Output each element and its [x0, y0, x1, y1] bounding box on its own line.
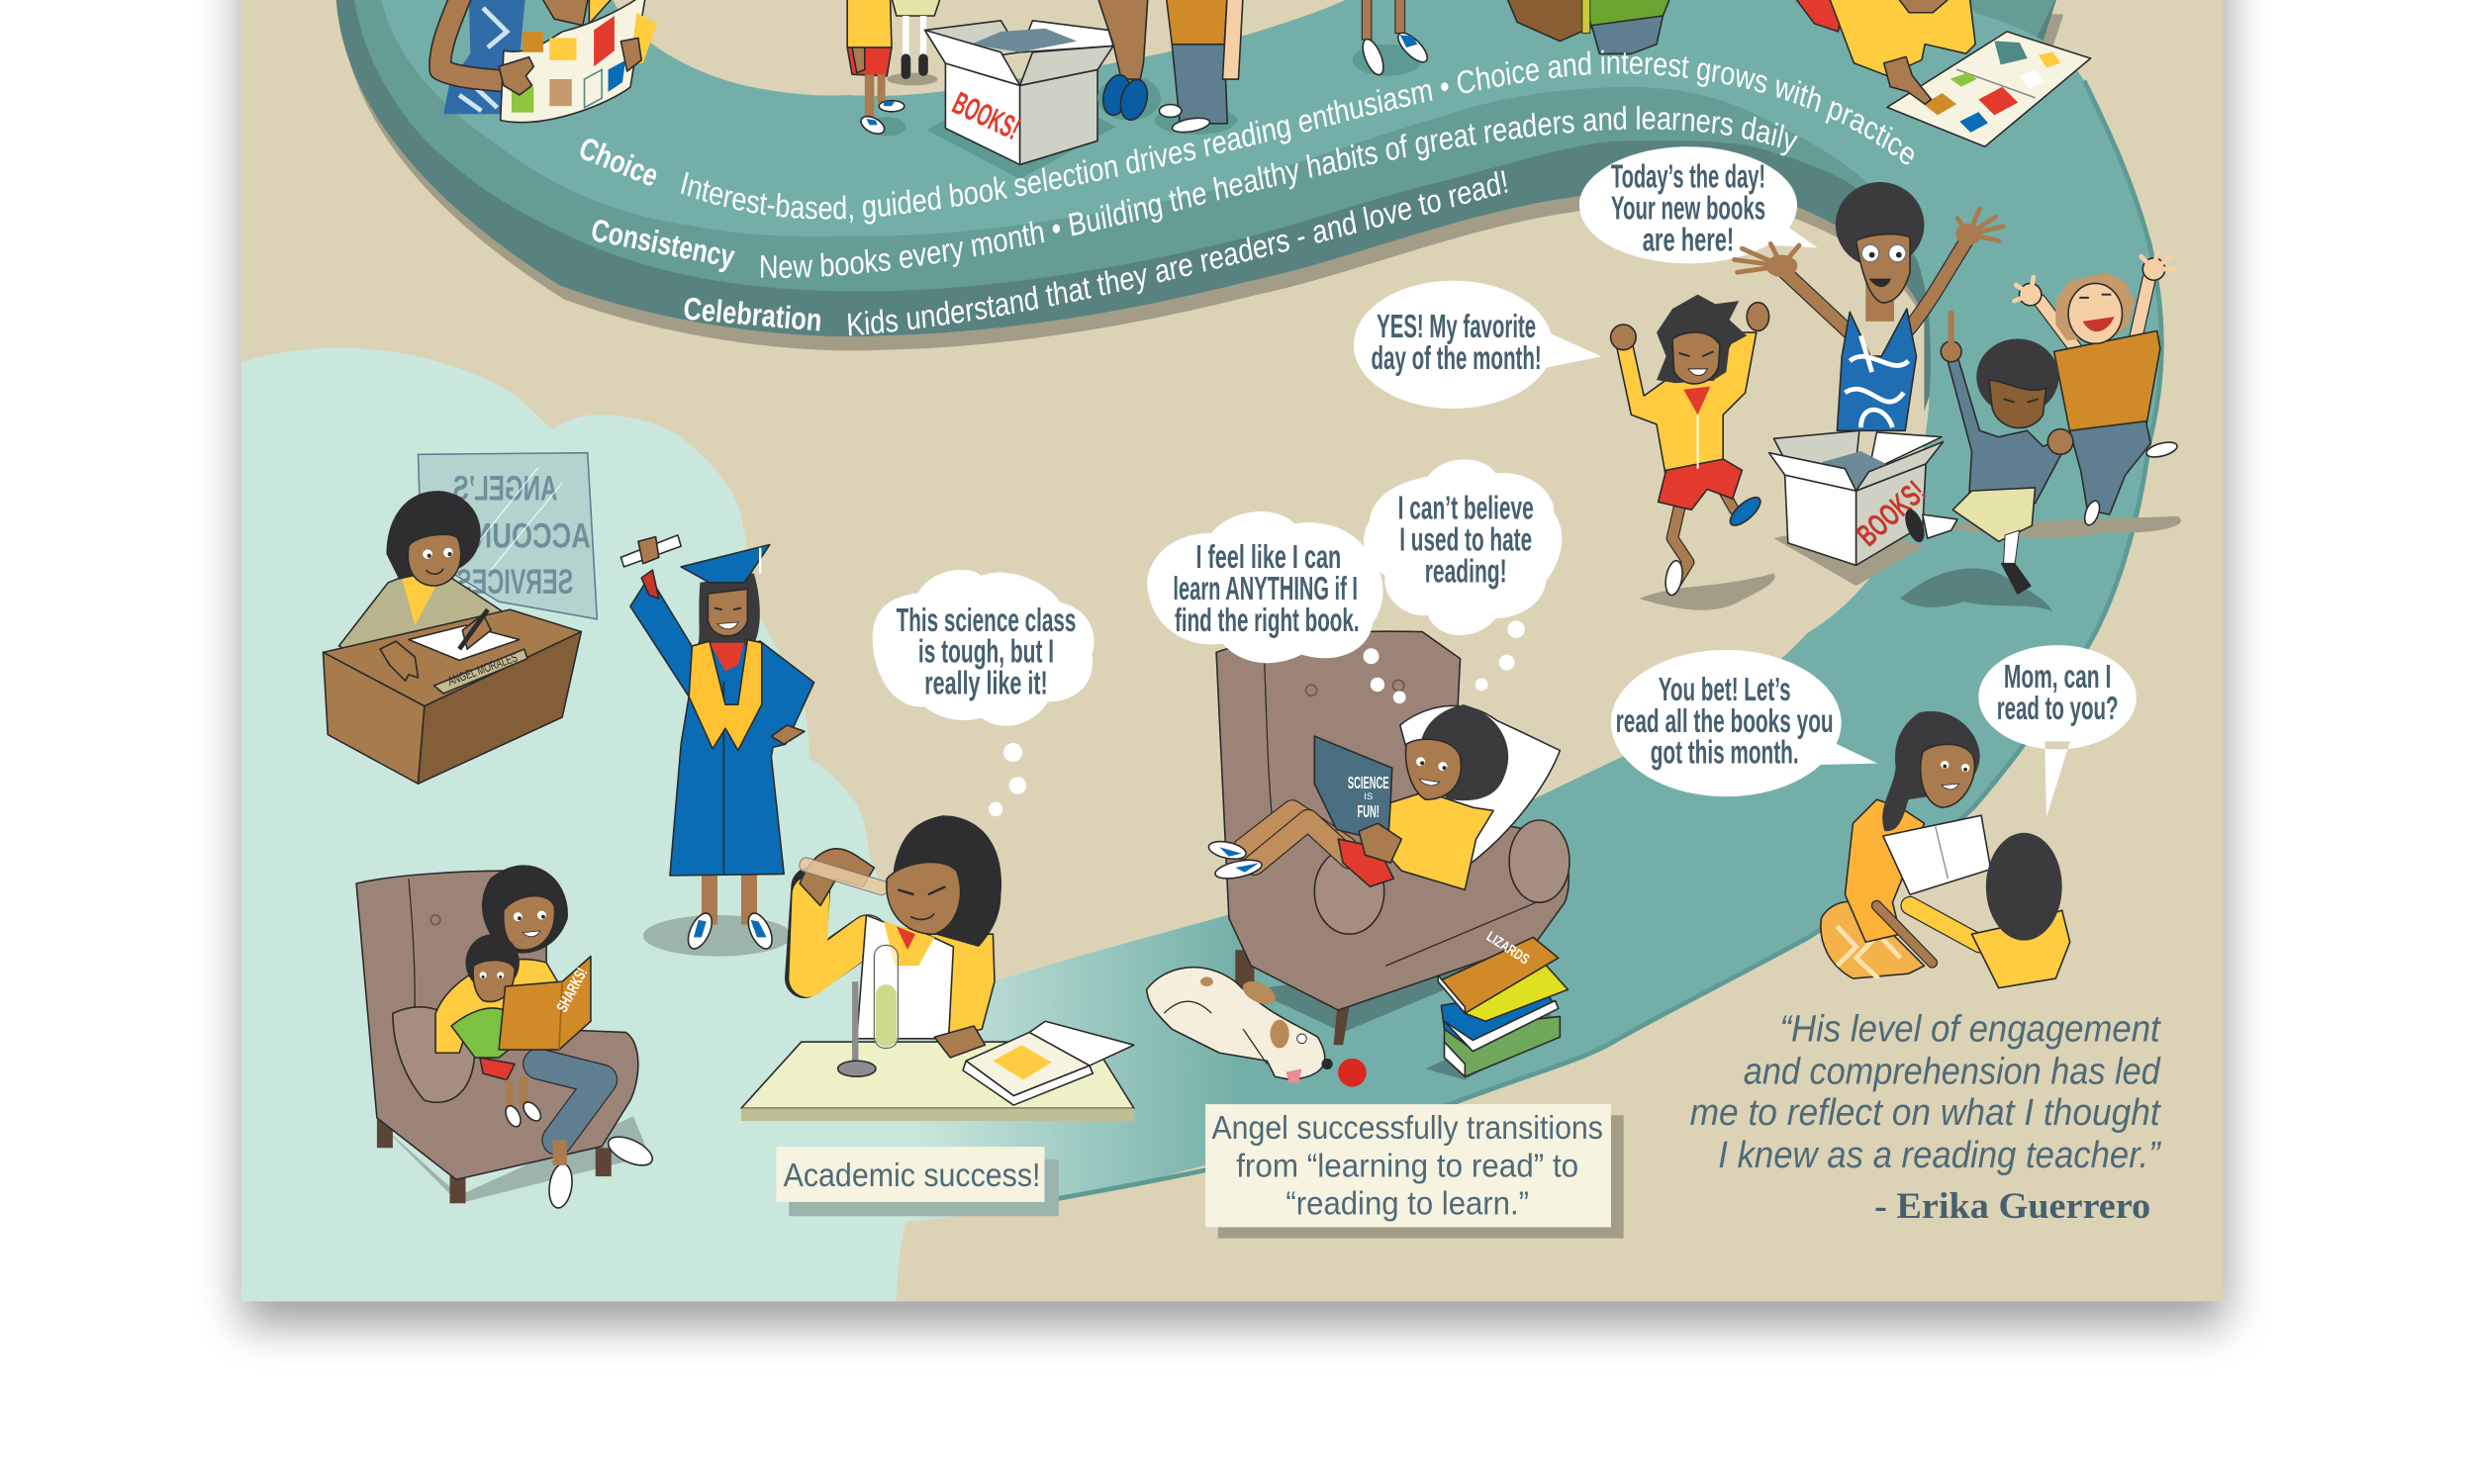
- figure: graduate in blue gown: [620, 535, 814, 957]
- figure: child reading in armchair: FUN!: [1358, 801, 1380, 821]
- ribbon: darker edge of path: [1013, 81, 2161, 1206]
- figure: white child cheering: [2015, 253, 2179, 527]
- speech bubble: YES my favorite day: YES! My favorite: [1377, 309, 1536, 345]
- icon: stack of books: LIZARDS: [1483, 929, 1532, 969]
- figure: teen doing science experiment: [741, 815, 1134, 1121]
- thought cloud: used to hate reading: I can’t believe: [1398, 491, 1534, 527]
- figure: child reading in armchair: [1207, 631, 1570, 1045]
- figure: adult Angel at accountant desk: ANGEL’S: [453, 470, 557, 509]
- quote: Erika Guerrero: I knew as a reading teacher.”: [1718, 1134, 2162, 1176]
- caption: learning to read to reading to learn: from “learning to read” to: [1236, 1148, 1578, 1184]
- icon: BOOKS box with teacher: [1769, 430, 1944, 565]
- figure: child lying on stomach with book: [1791, 0, 2091, 146]
- figure: adult legs with blue shoes: [1095, 0, 1161, 123]
- speech bubble: You bet: got this month.: [1651, 735, 1799, 772]
- ribbon text: Choice line: Interest-based, guided book selection drives reading enthusiasm • Choice and interest grows with practice: [681, 49, 1914, 224]
- figure: child with yellow jacket: [847, 0, 905, 138]
- ribbon: shadow: [340, 6, 2063, 425]
- speech bubble: You bet: You bet! Let’s: [1659, 672, 1791, 708]
- thought cloud: science class: really like it!: [924, 666, 1048, 702]
- panel: poster background: [241, 0, 2223, 1301]
- ribbon: celebration band: [335, 0, 2058, 412]
- quote: Erika Guerrero: [1690, 1007, 2162, 1226]
- ribbon label: Choice: Choice: [574, 130, 664, 194]
- quote: Erika Guerrero: - Erika Guerrero: [1874, 1185, 2150, 1226]
- icon: stack of books: [1425, 929, 1568, 1079]
- speech bubble: Today's the day: Your new books: [1611, 191, 1765, 228]
- figure: child reading in armchair: IS: [1364, 791, 1373, 802]
- ribbon label: Celebration: Celebration: [682, 291, 823, 338]
- quote: Erika Guerrero: me to reflect on what I thought: [1690, 1091, 2161, 1134]
- caption: learning to read to reading to learn: [1205, 1104, 1624, 1239]
- figure: dog lying by chair: [1147, 968, 1333, 1083]
- figure: legs with blue and white shoes: [1353, 0, 1432, 77]
- mint cloud background: [241, 348, 982, 1302]
- quote: Erika Guerrero: “His level of engagement: [1779, 1007, 2161, 1050]
- thought cloud: learn anything: [1147, 511, 1406, 703]
- figure: child reading in armchair: SCIENCE: [1348, 773, 1389, 792]
- icon: BOOKS box on path: BOOKS!: [947, 85, 1025, 146]
- ribbon label: Consistency: Consistency: [588, 212, 738, 274]
- thought cloud: used to hate reading: reading!: [1425, 553, 1507, 590]
- ribbon text: Consistency line: New books every month • Building the healthy habits of great readers and learners daily: [761, 105, 1798, 279]
- figure: teacher cheering: [1734, 182, 2003, 430]
- icon: BOOKS box on path: [925, 21, 1116, 179]
- figure: adult Angel at accountant desk: ANGEL MORALES: [445, 650, 520, 689]
- thought cloud: used to hate reading: [1364, 459, 1562, 691]
- caption: learning to read to reading to learn: Angel successfully transitions: [1211, 1110, 1603, 1147]
- caption: Academic success: Academic success!: [784, 1158, 1040, 1194]
- ribbon: consistency band: [353, 0, 2058, 292]
- thought cloud: science class: [873, 570, 1094, 816]
- speech bubble: You bet: read all the books you: [1616, 703, 1834, 740]
- ribbon: choice band and path: [380, 0, 2161, 1159]
- figure: adult Angel at accountant desk: ACCOUNT: [456, 517, 591, 556]
- caption: Academic success: [776, 1147, 1059, 1216]
- speech bubble: Today's the day: are here!: [1643, 223, 1734, 259]
- speech bubble: YES my favorite day: [1354, 281, 1601, 409]
- ribbon: inner beige hole: [610, 0, 1362, 96]
- speech bubble: Mom can I read to you: [1978, 645, 2137, 817]
- thought cloud: science class: This science class: [897, 603, 1076, 639]
- icon: open textbook on table: [963, 1021, 1134, 1105]
- panel drop shadow: [241, 0, 2227, 1325]
- speech bubble: Mom can I read to you: Mom, can I: [2004, 659, 2111, 696]
- figure: child with backpack and green shirt: [1504, 0, 1672, 53]
- icon: BOOKS box with teacher: BOOKS!: [1850, 474, 1933, 553]
- figure: parent reading SHARKS book to child in armchair: SHARKS!: [554, 966, 591, 1015]
- figure: parent reading SHARKS book to child in armchair: [356, 866, 656, 1209]
- figure: adult with orange shirt: [1155, 0, 1243, 135]
- thought cloud: used to hate reading: I used to hate: [1399, 521, 1532, 558]
- thought cloud: science class: is tough, but I: [918, 634, 1054, 671]
- figure: small child with black shoes: [887, 0, 942, 85]
- speech bubble: Today's the day: Today’s the day!: [1611, 159, 1765, 196]
- figure: adult Angel at accountant desk: [323, 453, 597, 784]
- speech bubble: YES my favorite day: day of the month!: [1372, 340, 1542, 377]
- figure: woman with book catalog: [440, 0, 657, 123]
- thought cloud: learn anything: find the right book.: [1175, 603, 1360, 639]
- figure: child reading to mother on floor: [1821, 711, 2070, 988]
- speech bubble: You bet: [1611, 650, 1877, 796]
- quote: Erika Guerrero: and comprehension has led: [1744, 1050, 2161, 1092]
- ribbon text: Celebration line: Kids understand that they are readers - and love to read!: [847, 170, 1508, 336]
- speech bubble: Mom can I read to you: read to you?: [1997, 691, 2118, 727]
- speech bubble: Today's the day: [1579, 146, 1818, 263]
- ribbon: fading tail of path: [895, 912, 1238, 1222]
- figure: jumping child with yellow jacket: [1611, 295, 1769, 597]
- icon: red ball: [1338, 1059, 1367, 1087]
- caption: learning to read to reading to learn: “reading to learn.”: [1285, 1186, 1529, 1223]
- figure: adult Angel at accountant desk: SERVICES: [456, 563, 573, 602]
- thought cloud: learn anything: I feel like I can: [1196, 539, 1341, 576]
- figure: child in blue sweater and skirt: [1901, 311, 2073, 594]
- figure shadows: jumping children: [1639, 516, 2181, 611]
- thought cloud: learn anything: learn ANYTHING if I: [1173, 571, 1358, 607]
